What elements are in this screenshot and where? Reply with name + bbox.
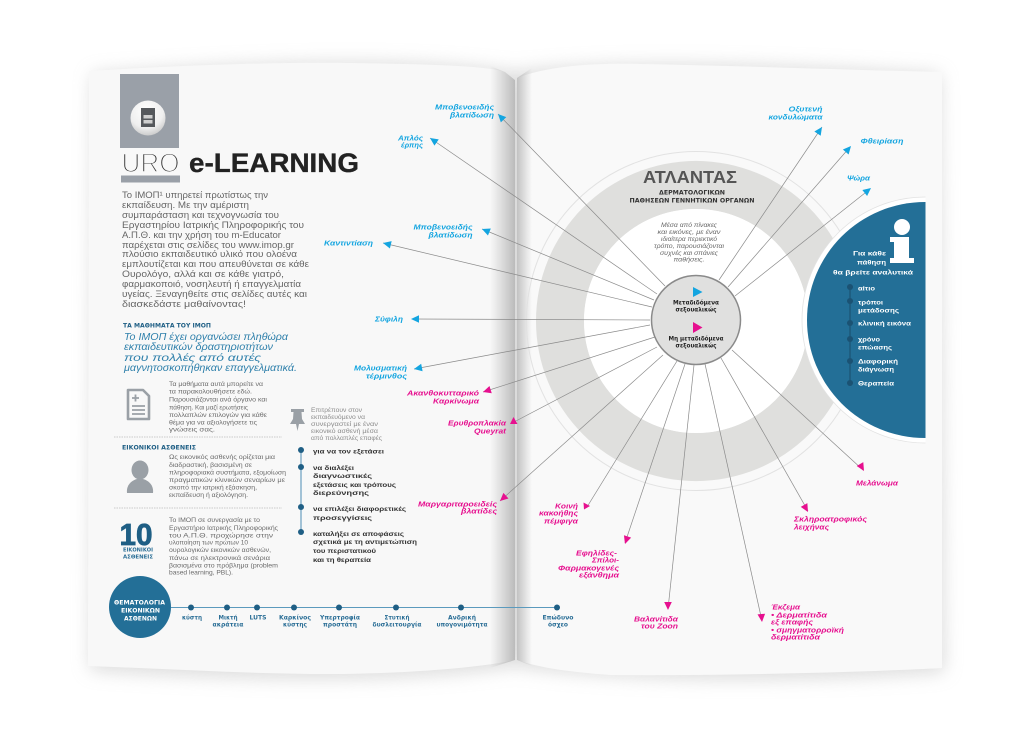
arrows: connector lines xyxy=(383,114,870,621)
timeline: steps: διερεύνησης xyxy=(313,490,370,497)
atlas description: συχνές και σπάνιες xyxy=(660,249,719,257)
center circle: Μη μεταδιδόμενα xyxy=(668,336,724,342)
lessons text: πολλαπλών επιλογών για κάθε xyxy=(169,412,267,419)
virtual patients heading: ΕΙΚΟΝΙΚΟΙ ΑΣΘΕΝΕΙΣ xyxy=(122,444,196,452)
stat: 10 virtual patients: ΑΣΘΕΝΕΙΣ xyxy=(123,554,153,560)
timeline: steps: να διαλέξει xyxy=(313,464,354,472)
labels: sexually transmitted conditions: Ψώρα xyxy=(847,174,870,182)
timeline: steps: καταλήξει σε αποφάσεις xyxy=(313,530,405,538)
stat: 10 virtual patients: 10 xyxy=(120,517,152,552)
labels: sexually transmitted conditions: Απλός xyxy=(397,134,424,142)
collaboration text xyxy=(169,517,278,576)
topics timeline xyxy=(171,604,574,628)
title underline bar xyxy=(121,176,180,182)
labels: non sexually transmitted conditions: του Zoon xyxy=(641,622,678,630)
labels: non sexually transmitted conditions: Queyrat xyxy=(474,426,507,436)
info panel list: αίτιο xyxy=(858,286,875,292)
labels: non sexually transmitted conditions: Μαργαριταροειδείς xyxy=(418,500,498,508)
info panel list: διάγνωση xyxy=(858,366,894,374)
title: e-LEARNING xyxy=(189,148,359,178)
intro paragraph: εκπαίδευση. Με την αμέριστη xyxy=(122,200,249,210)
labels: non sexually transmitted conditions: Βαλανίτιδα xyxy=(634,614,678,624)
labels: sexually transmitted conditions: βλατίδωση xyxy=(427,230,473,240)
arrowheads: non sexually transmitted xyxy=(482,386,867,622)
labels: non sexually transmitted conditions xyxy=(406,388,898,642)
collaboration text: βασισμένα στο πρόβλημα (problem xyxy=(169,562,278,570)
atlas description: ιδιαίτερα περιεκτικό xyxy=(661,235,718,243)
labels: non sexually transmitted conditions: Καρκίνωμα xyxy=(433,396,479,406)
topics timeline: Στυτική xyxy=(384,614,410,622)
right page xyxy=(517,64,942,675)
labels: sexually transmitted conditions: κονδυλώματα xyxy=(768,112,823,122)
lessons lead text: εκπαιδευτικών δραστηριοτήτων xyxy=(124,341,273,353)
labels: sexually transmitted conditions xyxy=(324,102,904,380)
left page xyxy=(88,63,515,674)
info panel list: Διαφορική xyxy=(858,358,898,366)
labels: non sexually transmitted conditions: εξ επαφής xyxy=(771,618,814,626)
title: URO xyxy=(122,148,180,178)
title xyxy=(122,148,359,178)
atlas description: Μέσα από πίνακες xyxy=(661,221,718,229)
labels: non sexually transmitted conditions: κακοήθης xyxy=(539,508,579,518)
center circle: Μεταδιδόμενα xyxy=(673,300,719,306)
timeline: steps: διαγνωστικές xyxy=(313,473,373,480)
info panel list: κλινική εικόνα xyxy=(858,320,911,328)
virtual patients text: διαδραστική, βασισμένη σε xyxy=(169,462,252,469)
labels: non sexually transmitted conditions: • Δερματίτιδα xyxy=(771,610,827,620)
topics timeline: ακράτεια xyxy=(212,622,244,628)
labels: sexually transmitted conditions: τέρμινθος xyxy=(366,372,408,380)
atlas ring xyxy=(526,152,866,490)
intro paragraph: Ουρολόγο, αλλά και σε κάθε γιατρό, xyxy=(122,269,284,279)
arrowheads: sexually transmitted xyxy=(382,111,873,373)
header tab with icon xyxy=(120,74,179,148)
collaboration text: based learning, PBL). xyxy=(169,570,233,576)
virtual patients text: πραγματικών κλινικών σεναρίων με xyxy=(169,477,285,484)
labels: non sexually transmitted conditions: Ερυθροπλακία xyxy=(448,418,506,428)
lessons text: γνώσεις σας. xyxy=(169,426,215,434)
labels: sexually transmitted conditions: Σύφιλη xyxy=(374,314,403,324)
pin note: συνεργαστεί με έναν xyxy=(311,421,378,428)
lessons heading: ΤΑ ΜΑΘΗΜΑΤΑ ΤΟΥ ΙΜΟΠ xyxy=(123,322,211,330)
stat: 10 virtual patients: ΕΙΚΟΝΙΚΟΙ xyxy=(123,548,153,554)
atlas title: ΔΕΡΜΑΤΟΛΟΓΙΚΩΝ xyxy=(659,190,725,196)
info panel heading: Για κάθε xyxy=(853,250,886,258)
labels: sexually transmitted conditions: Μποβενοειδής xyxy=(414,222,474,232)
info panel heading: θα βρείτε αναλυτικά xyxy=(833,268,913,276)
labels: non sexually transmitted conditions: Σπίλοι- xyxy=(591,556,619,564)
virtual patients text: σκοπό την ιατρική εξάσκηση, xyxy=(169,484,257,492)
lessons lead text: που πολλές από αυτές xyxy=(124,352,261,364)
labels: non sexually transmitted conditions: Μελάνωμα xyxy=(856,478,898,488)
topics timeline: προστάτη xyxy=(323,622,357,628)
labels: non sexually transmitted conditions: εξάνθημα xyxy=(579,570,619,580)
labels: non sexually transmitted conditions: Ακανθοκυτταρικό xyxy=(406,388,479,398)
pin note: από πολλαπλές επαφές xyxy=(311,435,382,442)
collaboration text: Το ΙΜΟΠ σε συνεργασία με το xyxy=(169,517,261,524)
topics circle xyxy=(109,576,171,638)
info panel heading xyxy=(833,250,913,276)
labels: sexually transmitted conditions: Οξυτενή xyxy=(788,104,823,114)
icon: person xyxy=(127,460,153,493)
labels: non sexually transmitted conditions: Σκληροατροφικός xyxy=(793,514,868,524)
info panel list: Θεραπεία xyxy=(858,380,894,388)
virtual patients text: πληροφοριακά συστήματα, εξομοίωση xyxy=(169,470,287,476)
lessons text: Τα μαθήματα αυτά μπορείτε να xyxy=(169,381,263,388)
topics timeline: υπογονιμότητα xyxy=(436,622,488,628)
icon: info xyxy=(890,219,914,263)
intro paragraph: διασκεδάστε μαθαίνοντας! xyxy=(122,299,246,309)
topics timeline: κύστης xyxy=(283,622,308,628)
labels: non sexually transmitted conditions: πέμφιγα xyxy=(544,516,578,526)
intro paragraph: Α.Π.Θ. και την χρήση του m-Educator xyxy=(122,230,281,240)
timeline: steps: και τη θεραπεία xyxy=(313,557,371,564)
collaboration text: του Α.Π.Θ. προχώρησε στην xyxy=(169,532,273,540)
topics timeline: Ανδρική xyxy=(448,614,476,622)
intro paragraph: φαρμακοποιό, νοσηλευτή ή επαγγελματία xyxy=(122,279,301,289)
labels: non sexually transmitted conditions: Έκζεμα xyxy=(771,602,800,612)
timeline: steps: προσεγγίσεις xyxy=(313,515,373,522)
labels: non sexually transmitted conditions: • σμηγματορροϊκή xyxy=(771,626,844,634)
labels: sexually transmitted conditions: έρπης xyxy=(401,140,424,150)
center circle: σεξουαλικώς xyxy=(676,306,717,314)
lessons text: θέμα για να αξιολογήσετε τις xyxy=(169,420,257,426)
book shadow xyxy=(90,62,944,679)
intro paragraph: Το ΙΜΟΠ¹ υπηρετεί πρωτίστως την xyxy=(122,190,269,200)
timeline: steps: του περιστατικού xyxy=(313,548,376,555)
virtual patients text xyxy=(169,454,287,499)
timeline: steps: εξετάσεις και τρόπους xyxy=(313,482,397,489)
lessons text: τα παρακολουθήσετε εδώ. xyxy=(169,388,252,396)
topics timeline: Μικτή xyxy=(218,614,238,622)
atlas description: και εικόνες, με έναν xyxy=(658,228,721,236)
pin note: εικονικό ασθενή μέσα xyxy=(311,428,379,435)
intro paragraph: υγείας. Ξεναγηθείτε στις σελίδες αυτές και xyxy=(122,289,307,299)
intro paragraph: Εργαστηρίου Ιατρικής Πληροφορικής του xyxy=(122,220,304,230)
lessons lead text: Το ΙΜΟΠ έχει οργανώσει πληθώρα xyxy=(124,331,288,343)
virtual patients text: εκπαίδευση ή αξιολόγηση. xyxy=(169,492,248,499)
info panel list xyxy=(847,284,911,388)
info panel list: επώασης xyxy=(858,344,893,352)
atlas title: ΠΑΘΗΣΕΩΝ ΓΕΝΝΗΤΙΚΩΝ ΟΡΓΑΝΩΝ xyxy=(630,198,755,204)
topics timeline: κύστη xyxy=(182,614,202,622)
lessons text xyxy=(169,381,268,434)
topics circle: ΘΕΜΑΤΟΛΟΓΙΑ xyxy=(114,600,165,606)
topics timeline: Υπερτροφία xyxy=(319,614,360,622)
topics timeline: Καρκίνος xyxy=(279,614,312,622)
pin note: εκπαιδευόμενο να xyxy=(311,414,366,421)
labels: non sexually transmitted conditions: Κοινή xyxy=(555,502,578,510)
lessons lead text xyxy=(123,331,297,374)
virtual patients text: Ως εικονικός ασθενής ορίζεται μια xyxy=(169,454,275,461)
topics circle: ΑΣΘΕΝΩΝ xyxy=(124,616,157,622)
timeline: steps: να επιλέξει διαφορετικές xyxy=(313,505,407,513)
center circle: σεξουαλικώς xyxy=(676,342,717,350)
pin note: Επιτρέπουν στον xyxy=(311,407,362,414)
icon: document xyxy=(128,390,149,419)
info semicircle panel xyxy=(802,196,926,444)
labels: non sexually transmitted conditions: βλατίδες xyxy=(460,506,498,516)
collaboration text: ουρολογικών εικονικών ασθενών, xyxy=(169,547,271,554)
labels: sexually transmitted conditions: βλατίδωση xyxy=(449,110,494,120)
collaboration text: υλοποίηση των πρώτων 10 xyxy=(169,540,249,546)
topics timeline: όσχεο xyxy=(548,622,568,628)
atlas description: παθήσεις. xyxy=(674,256,704,264)
timeline: steps: σχετικά με τη αντιμετώπιση xyxy=(313,539,417,546)
pin note xyxy=(311,407,382,442)
intro paragraph: παρέχεται στις σελίδες του www.imop.gr xyxy=(122,240,294,250)
intro paragraph xyxy=(122,190,309,309)
topics timeline: Επώδυνο xyxy=(542,614,574,622)
labels: non sexually transmitted conditions: Φαρμακογενές xyxy=(558,564,620,572)
info panel list: χρόνο xyxy=(858,336,880,344)
atlas description: τρόπο, παρουσιάζονται xyxy=(654,242,725,250)
labels: non sexually transmitted conditions: δερματίτιδα xyxy=(771,632,820,642)
topics circle: ΕΙΚΟΝΙΚΩΝ xyxy=(121,608,160,614)
labels: non sexually transmitted conditions: Εφηλίδες- xyxy=(576,548,618,558)
lessons text: Παρουσιάζονται ανά όργανο και xyxy=(169,396,268,404)
timeline: steps xyxy=(298,447,417,564)
atlas description xyxy=(654,221,725,264)
labels: sexually transmitted conditions: Καντιντίαση xyxy=(324,238,373,248)
lessons text: πάθηση. Και μαζί ερωτήσεις xyxy=(169,404,248,412)
timeline: steps: για να τον εξετάσει xyxy=(313,448,384,456)
collaboration text: Εργαστήριο Ιατρικής Πληροφορικής xyxy=(169,525,278,532)
center circle xyxy=(652,276,740,364)
labels: sexually transmitted conditions: Μποβενοειδής xyxy=(435,102,495,112)
icon: pin xyxy=(290,409,305,431)
topics timeline: LUTS xyxy=(250,616,266,622)
intro paragraph: πλούσιο εκπαιδευτικό υλικό που ολοένα xyxy=(122,249,297,259)
atlas title xyxy=(630,167,755,204)
info panel list: τρόποι xyxy=(858,300,883,306)
topics timeline: δυσλειτουργία xyxy=(372,622,422,628)
lessons lead text: μαγνητοσκοπήθηκαν επαγγελματικά. xyxy=(123,362,297,374)
labels: sexually transmitted conditions: Μολυσματική xyxy=(354,364,407,372)
labels: sexually transmitted conditions: Φθειρίαση xyxy=(860,136,904,146)
intro paragraph: εμπλουτίζεται και που απευθύνεται σε κάθε xyxy=(122,259,309,269)
info panel heading: πάθηση xyxy=(857,260,886,266)
atlas title: ΑΤΛΑΝΤΑΣ xyxy=(643,167,737,187)
info panel list: μετάδοσης xyxy=(858,308,900,314)
labels: non sexually transmitted conditions: λειχήνας xyxy=(793,522,830,532)
collaboration text: πάνω σε ηλεκτρονικά σενάρια xyxy=(169,555,271,562)
intro paragraph: συμπαράσταση και τεχνογνωσία του xyxy=(122,210,279,220)
